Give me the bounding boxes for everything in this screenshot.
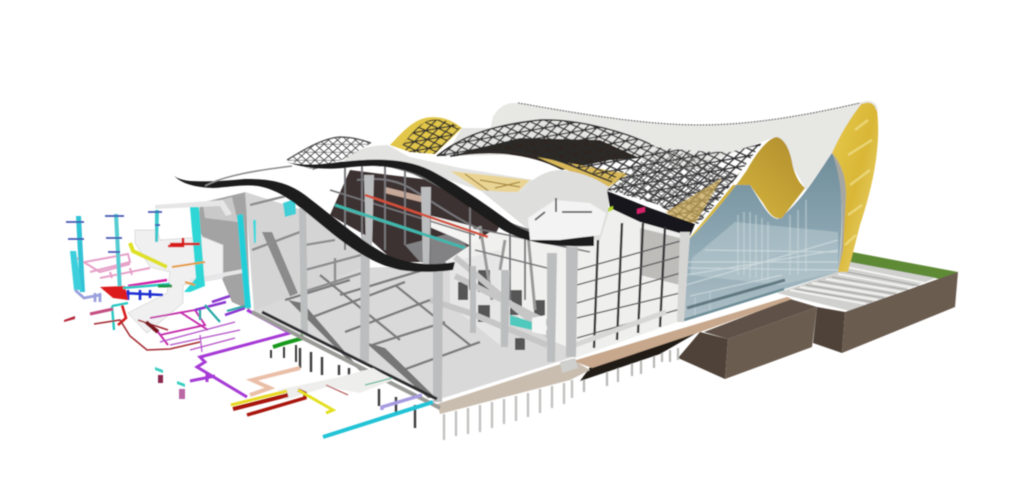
small magenta and lime tags: [637, 207, 645, 214]
roof: grey inner wall at right arch: [832, 153, 846, 272]
truss: front lattice: [607, 143, 762, 232]
MEP: long purple pipe: [190, 310, 290, 397]
interior grey wall: [405, 232, 470, 272]
small lime tag: [608, 206, 613, 212]
dark slab trim: [262, 312, 437, 399]
wall rails: [250, 195, 365, 292]
roof: far gold shell with truss: [390, 117, 462, 154]
right white block structure: [445, 226, 578, 350]
MEP: teal line on slab: [365, 378, 392, 385]
MEP: bright blue pipe: [123, 290, 163, 300]
foundation block: middle: [678, 299, 817, 379]
floor: [254, 265, 573, 400]
MEP: long cyan duct: [323, 402, 433, 437]
MEP: teal pipe: [112, 284, 170, 330]
MEP: red block: [100, 286, 128, 300]
piles beneath floor: [300, 348, 572, 440]
front black beam: [173, 175, 455, 272]
MEP: lavender duct: [382, 395, 422, 410]
MEP: magenta pipe: [128, 280, 167, 286]
MEP: violet pipe: [195, 296, 245, 315]
rear white beam: [575, 312, 666, 345]
dark under-slab wedge: [580, 331, 700, 381]
concrete block at corner: [560, 358, 578, 373]
MEP: cyan risers: [70, 207, 256, 308]
teal floor equipment: [510, 315, 532, 330]
front main columns: [299, 175, 578, 402]
rear black beam: [287, 160, 594, 246]
MEP: pink pipes: [77, 254, 150, 278]
main wall: [245, 192, 365, 311]
truss: gold tinted panel: [666, 178, 722, 226]
gold band under lattice: [537, 157, 628, 188]
eave beam roof link: [205, 166, 292, 186]
MEP: white ducts: [128, 200, 243, 333]
foundation block: right: [813, 272, 958, 353]
rear grey bracing: [345, 163, 525, 300]
roof: right gold shell streaks: [845, 120, 872, 245]
truss: second layer front lattice: [612, 150, 735, 220]
white block by teal equipment: [532, 315, 546, 335]
MEP: green spur verticals: [271, 345, 296, 362]
rear grey rails: [330, 190, 590, 270]
white roof vault right: [480, 170, 610, 240]
truss: left arch chord: [287, 137, 371, 160]
MEP: blue branches: [66, 212, 162, 252]
MEP: maroon short duct: [146, 322, 158, 332]
rear structure interior: [540, 205, 690, 358]
white block beams: [430, 257, 552, 345]
MEP: dark red pipes: [94, 320, 200, 350]
roof: white membrane: [490, 102, 862, 190]
dark interior void: [330, 170, 500, 262]
cream panel streaks: [465, 174, 520, 192]
MEP: lavender loop: [75, 290, 100, 302]
MEP: white slab: [277, 368, 393, 400]
rear grey beam chord: [347, 163, 540, 232]
rear bay grey back area: [640, 228, 688, 285]
roof: white band behind left lattice: [445, 120, 600, 156]
MEP: pink dash: [90, 309, 113, 314]
rear steel rails: [577, 240, 685, 338]
floor shadow wedge: [288, 300, 436, 398]
MEP: fine red line on slab: [326, 385, 348, 395]
upper white equipment: [528, 200, 606, 240]
slab edge: [252, 312, 440, 408]
MEP: green pipe by floor: [273, 335, 303, 347]
MEP: red pipes: [118, 238, 200, 325]
ground: striped concrete terrace: [777, 262, 936, 311]
MEP: fine magenta grid: [160, 322, 240, 352]
rear dark steel columns: [594, 223, 665, 348]
MEP: orange pipes: [172, 262, 205, 285]
tan slab strip: [573, 297, 792, 368]
truss: eave band: [607, 191, 695, 236]
roof: right gold shell rim: [862, 102, 877, 110]
floor shadow lattice: [285, 265, 480, 370]
MEP: magenta pipes on floor: [150, 310, 208, 345]
truss: left arch: [287, 137, 371, 170]
glass curtain wall: [683, 153, 842, 321]
cyan equipment: [283, 199, 296, 217]
interior tan beam: [385, 190, 425, 200]
truss: upper lattice chords: [437, 120, 650, 182]
truss: upper central lattice: [437, 120, 655, 180]
cream roof panel: [450, 171, 530, 192]
wing wall light face: [203, 197, 238, 222]
MEP: yellow-green duct: [130, 243, 167, 267]
ground: green lawn strip: [850, 252, 958, 279]
thin slab trim beneath main floor: [437, 360, 590, 414]
roof: central gold shell: [688, 137, 805, 240]
roof: right gold shell: [832, 102, 878, 272]
MEP: teal spur: [200, 305, 245, 322]
MEP: green pipe: [158, 284, 172, 288]
far gold/white roof band: [343, 145, 533, 193]
MEP: yellow and red mains: [231, 390, 333, 415]
piles under tan strip: [584, 348, 678, 392]
MEP: small floating pieces: [64, 316, 185, 399]
column at glass corner: [677, 232, 690, 322]
teal duct in interior: [335, 205, 465, 248]
wall shadow: [262, 232, 305, 310]
MEP: tan duct: [250, 368, 300, 395]
dark arch opening under truss: [450, 138, 640, 170]
left grey wing wall: [198, 192, 250, 310]
red duct in interior: [365, 195, 488, 237]
interior white block: [425, 215, 480, 250]
roof equipment grey outline: [535, 198, 592, 220]
